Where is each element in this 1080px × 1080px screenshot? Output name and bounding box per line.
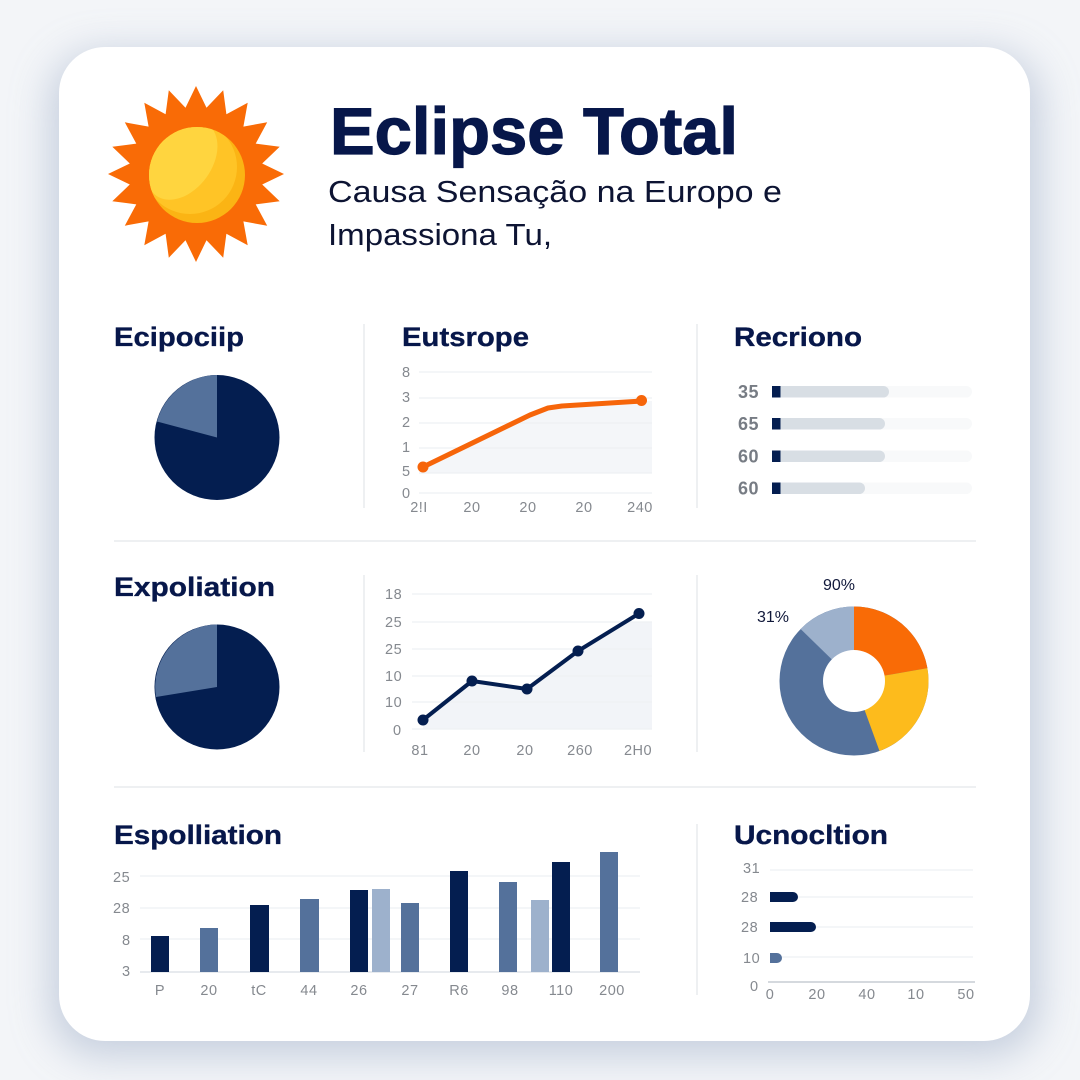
- x axis labels: 0: [766, 987, 774, 1003]
- x axis labels: 44: [300, 983, 318, 999]
- title: Eclipse Total: [330, 94, 738, 168]
- panel: Ucnocltion horizontal bars: [734, 820, 975, 1003]
- y axis labels: 3: [402, 390, 411, 406]
- line chart: navy: [385, 587, 652, 759]
- x axis labels: 200: [599, 983, 625, 999]
- subtitle: Impassiona Tu,: [328, 217, 552, 252]
- x axis labels: 240: [627, 500, 653, 516]
- bar 2: [770, 922, 816, 932]
- x axis labels: 98: [501, 983, 519, 999]
- y axis labels: 25: [385, 615, 402, 631]
- bars: [151, 852, 618, 972]
- row 60: [738, 446, 972, 466]
- x axis labels: 260: [567, 743, 593, 759]
- x axis labels: 81: [411, 743, 429, 759]
- x axis labels: P: [155, 983, 165, 999]
- subtitle: Causa Sensação na Europo e: [328, 174, 782, 209]
- subtitle: [328, 174, 782, 252]
- row 65: [738, 414, 972, 434]
- x axis labels: 27: [401, 983, 419, 999]
- x axis labels: [411, 743, 652, 759]
- y axis labels: 8: [122, 933, 131, 949]
- heading: Expoliation: Expoliation: [114, 572, 275, 602]
- row 35: 35: [738, 382, 759, 402]
- y axis labels: 5: [402, 464, 411, 480]
- panel: donut chart: [757, 577, 929, 756]
- x axis labels: [410, 500, 653, 516]
- x axis labels: 20: [516, 743, 534, 759]
- y axis labels: 10: [385, 669, 402, 685]
- y axis labels: [741, 861, 760, 995]
- x axis labels: 20: [463, 743, 481, 759]
- y axis labels: 1: [402, 440, 411, 456]
- panel: Expoliation pie: [114, 572, 280, 750]
- heading: Recriono: Recriono: [734, 322, 862, 352]
- x axis labels: R6: [449, 983, 469, 999]
- x axis labels: 50: [957, 987, 975, 1003]
- y axis labels: 28: [741, 890, 758, 906]
- y axis labels: 25: [385, 642, 402, 658]
- y axis labels: 31: [743, 861, 760, 877]
- panel: Espolliation bar chart: [113, 820, 640, 999]
- heading: Ucnocltion: Ucnocltion: [734, 820, 888, 850]
- line chart: orange: [402, 365, 653, 516]
- row 35: [738, 382, 972, 402]
- y axis labels: [385, 587, 402, 739]
- y axis labels: 18: [385, 587, 402, 603]
- x axis labels: 20: [575, 500, 593, 516]
- icon: sun: [108, 86, 284, 262]
- donut chart: [780, 606, 929, 756]
- row 60 lower: 60: [738, 478, 759, 498]
- progress bar chart: [738, 382, 972, 498]
- x axis labels: 26: [350, 983, 368, 999]
- panel: Ecipociip pie: [114, 322, 280, 500]
- x axis labels: 2!I: [410, 500, 428, 516]
- x axis labels: [766, 987, 975, 1003]
- x axis labels: 110: [549, 983, 573, 999]
- bar chart: [113, 852, 640, 999]
- x axis labels: 2H0: [624, 743, 652, 759]
- pie chart 2: [154, 624, 280, 750]
- row 60 lower: [738, 478, 972, 498]
- y axis labels: [113, 870, 131, 980]
- y axis labels: 0: [750, 979, 759, 995]
- label 90%: 90%: [823, 577, 855, 594]
- x axis labels: 20: [463, 500, 481, 516]
- x axis labels: 20: [200, 983, 218, 999]
- y axis labels: 0: [402, 486, 411, 502]
- y axis labels: [402, 365, 411, 502]
- x axis labels: 20: [519, 500, 537, 516]
- y axis labels: 3: [122, 964, 131, 980]
- heading: Espolliation: Espolliation: [114, 820, 282, 850]
- x axis labels: [155, 983, 625, 999]
- y axis labels: 28: [113, 901, 130, 917]
- x axis labels: 20: [808, 987, 826, 1003]
- pie chart 1: [154, 375, 280, 500]
- bar 3: [770, 953, 782, 963]
- label 31%: 31%: [757, 609, 789, 626]
- heading: Eutsrope: Eutsrope: [402, 322, 529, 352]
- panel: navy line chart: [385, 587, 652, 759]
- y axis labels: 28: [741, 920, 758, 936]
- y axis labels: 10: [385, 695, 402, 711]
- x axis labels: tC: [251, 983, 267, 999]
- x axis labels: 40: [858, 987, 876, 1003]
- panel: Eutsrope line chart: [402, 322, 653, 516]
- y axis labels: 25: [113, 870, 130, 886]
- y axis labels: 2: [402, 415, 411, 431]
- heading: Ecipociip: Ecipociip: [114, 322, 244, 352]
- row 65: 65: [738, 414, 759, 434]
- horizontal bar chart: [741, 861, 975, 1003]
- y axis labels: 0: [393, 723, 402, 739]
- x axis labels: 10: [907, 987, 925, 1003]
- y axis labels: 8: [402, 365, 411, 381]
- bar 1: [770, 892, 798, 902]
- y axis labels: 10: [743, 951, 760, 967]
- row 60: 60: [738, 446, 759, 466]
- panel: Recriono progress bars: [734, 322, 972, 498]
